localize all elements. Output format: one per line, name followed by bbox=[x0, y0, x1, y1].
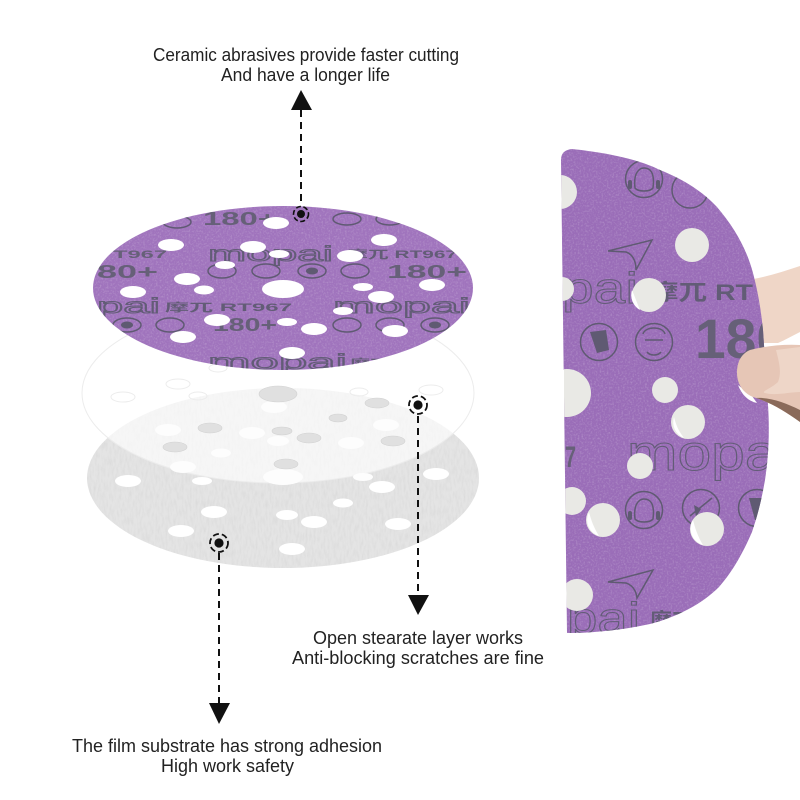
layer: film substrate disc bbox=[87, 388, 479, 568]
disc printed text: mopai bbox=[208, 243, 333, 266]
disc printed text: 7 bbox=[565, 441, 576, 474]
marker: ceramic layer bbox=[294, 206, 308, 222]
disc holes bbox=[120, 217, 445, 359]
layer: open stearate film bbox=[82, 303, 474, 485]
disc printed text: 摩兀 bbox=[650, 609, 694, 634]
holes bbox=[543, 175, 724, 611]
caption: stearate layer: Open stearate layer works bbox=[313, 628, 523, 648]
disc printed text: pai bbox=[562, 264, 638, 313]
disc printed text: mopai bbox=[333, 295, 470, 318]
disc printed text: 摩兀 bbox=[350, 356, 390, 370]
disc printed text bbox=[565, 271, 768, 633]
icon: upper finger behind disc bbox=[753, 266, 800, 343]
disc printed text: mopai bbox=[627, 425, 792, 481]
disc printed text: 180+ bbox=[203, 209, 277, 229]
marker: film substrate bbox=[210, 534, 228, 552]
disc printed text: 摩兀 RT bbox=[650, 280, 754, 305]
photo: folded purple disc bbox=[561, 149, 769, 633]
caption: ceramic abrasives: Ceramic abrasives provide faster cutting bbox=[153, 45, 459, 65]
disc printed text: pai bbox=[567, 594, 640, 643]
layer: purple ceramic abrasive disc bbox=[90, 205, 476, 374]
safety icons bbox=[580, 160, 776, 528]
caption: ceramic abrasives bbox=[153, 45, 459, 85]
arrow: film substrate down bbox=[209, 553, 230, 724]
disc printed text: 180+ bbox=[213, 315, 277, 335]
disc printed text: mopai bbox=[208, 351, 347, 374]
caption: film substrate bbox=[72, 736, 382, 776]
disc printed text: 180 bbox=[695, 307, 787, 370]
disc printed text: 80+ bbox=[97, 262, 158, 282]
caption: film substrate: The film substrate has strong adhesion bbox=[72, 736, 382, 756]
arrow: ceramic layer up bbox=[291, 90, 312, 206]
disc printed text: 摩兀 RT967 bbox=[347, 247, 457, 261]
arrow: stearate layer down bbox=[408, 416, 429, 615]
icon: thumb holding disc bbox=[737, 345, 800, 422]
disc printed text bbox=[97, 209, 470, 374]
caption: stearate layer bbox=[292, 628, 544, 668]
caption: stearate layer: Anti-blocking scratches are fine bbox=[292, 648, 544, 668]
disc printed text: T967 bbox=[113, 249, 167, 261]
caption: ceramic abrasives: And have a longer life bbox=[221, 65, 390, 85]
disc safety icons bbox=[113, 213, 449, 332]
brand arrows bbox=[608, 240, 653, 598]
disc printed text: 180+ bbox=[387, 262, 467, 282]
disc printed text: 摩兀 RT967 bbox=[165, 300, 292, 314]
disc printed text: pai bbox=[97, 295, 160, 318]
caption: film substrate: High work safety bbox=[161, 756, 294, 776]
marker: stearate layer bbox=[409, 396, 427, 414]
